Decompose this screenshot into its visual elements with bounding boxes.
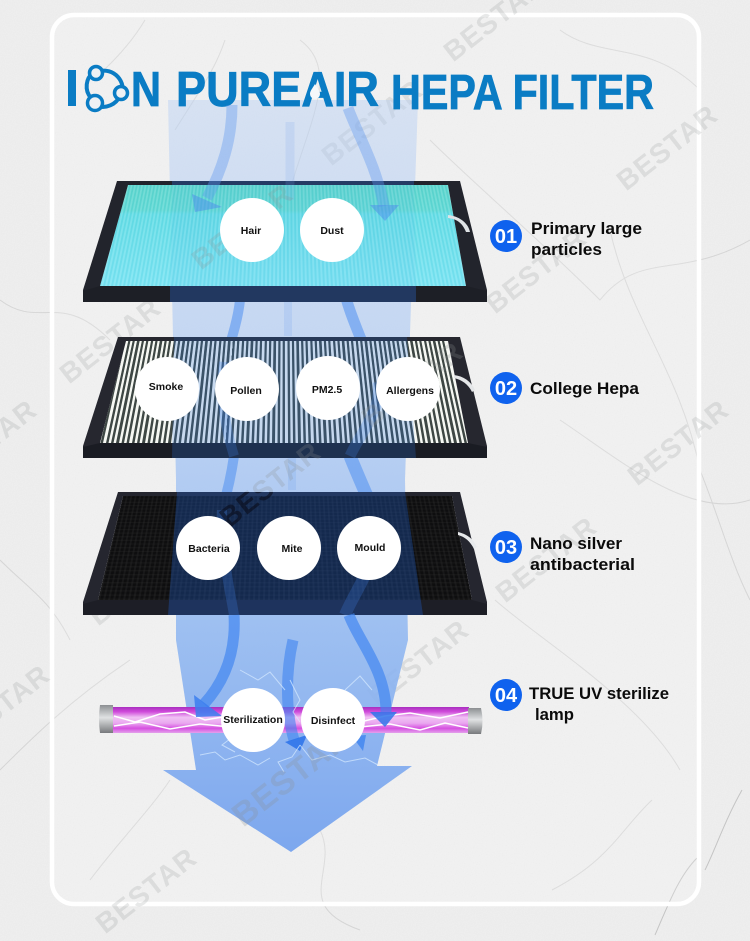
circle: Allergens [376,357,440,421]
watermarks over filters: BESTAR [214,436,327,533]
circle: PM2.5 [296,356,360,420]
electric sparks [200,670,378,772]
circle: PM2.5: PM2.5 [312,384,342,396]
circle: Dust: Dust [320,225,344,237]
circle: Sterilization: Sterilization [223,714,283,726]
circle: Allergens: Allergens [386,385,434,397]
circle: Hair [220,198,284,262]
step 04 label: TRUE UV sterilize [529,684,669,703]
lamp [99,705,482,734]
watermarks behind panels: BESTAR [480,222,593,319]
title: ION PUREAIR: PUREAIR [176,63,379,117]
lower airflow arrows [194,615,397,751]
title: ION PUREAIR: N [131,63,161,117]
watermarks behind panels: BESTAR [362,614,475,711]
watermarks behind panels: BESTAR [54,292,167,389]
title: HEPA FILTER: HEPA FILTER [391,66,654,120]
circle: Sterilization [221,688,285,752]
step 02 label: 02 [495,378,517,400]
step 02 label: College Hepa [530,379,640,398]
watermarks behind panels: BESTAR [90,842,203,939]
foreground: tints, arrows, lamp, circles, labels [68,64,668,826]
circle: Disinfect: Disinfect [311,715,356,727]
watermarks behind panels: BESTAR [316,74,429,171]
circle: Mite: Mite [282,543,303,555]
title [68,63,654,120]
circle: Mould [337,516,401,580]
step 01 label: Primary large [531,219,642,238]
circle: Smoke [135,357,199,421]
watermarks over filters: BESTAR [356,336,469,433]
step 01 label: 01 [495,226,517,248]
circle: Hair: Hair [241,225,261,237]
filter 1: primary cyan filter [83,181,487,302]
step 04 label: lamp [535,705,574,724]
circle: Bacteria: Bacteria [188,543,230,555]
circle: Disinfect [301,688,365,752]
watermarks over filters [186,178,469,833]
logo: three linked rings [87,66,128,110]
step 03 label: 03 [495,537,517,559]
watermarks behind panels: BESTAR [622,394,735,491]
watermarks behind panels: BESTAR [490,511,603,608]
step 04 label: 04 [495,685,518,707]
circle: Pollen: Pollen [230,385,262,397]
lamp caps [99,705,113,733]
step 03 label: Nano silver [530,534,622,553]
circle: Mould: Mould [355,542,385,554]
step 04 label [490,679,669,724]
airflow band with arrowhead [163,100,418,852]
step 03 label [490,531,635,574]
watermarks over filters: BESTAR [225,718,357,833]
circle: Mite [257,516,321,580]
watermarks over filters: BESTAR [214,436,327,533]
step 01 label: particles [531,240,602,259]
step 01 label [490,219,642,259]
circle: Smoke: Smoke [149,381,183,393]
watermarks behind panels: BESTAR [611,99,724,196]
title: ION PUREAIR [68,63,379,117]
lamp lightning [114,712,468,730]
lamp tube [112,707,469,733]
airflow stems between filters [222,298,378,522]
circle: Bacteria [176,516,240,580]
arrows through lower filters [222,362,379,615]
circle: Pollen [215,357,279,421]
filter 2: striped HEPA filter [83,337,487,458]
circle: Dust [300,198,364,262]
step 02 label [490,372,640,404]
watermarks behind panels: BESTAR [83,534,196,631]
step 03 label: antibacterial [530,555,635,574]
filter tints from airflow [168,181,423,615]
arrows over first filter [192,105,399,221]
watermarks over filters: BESTAR [186,178,299,275]
filter 3: black nano silver filter [83,492,487,615]
